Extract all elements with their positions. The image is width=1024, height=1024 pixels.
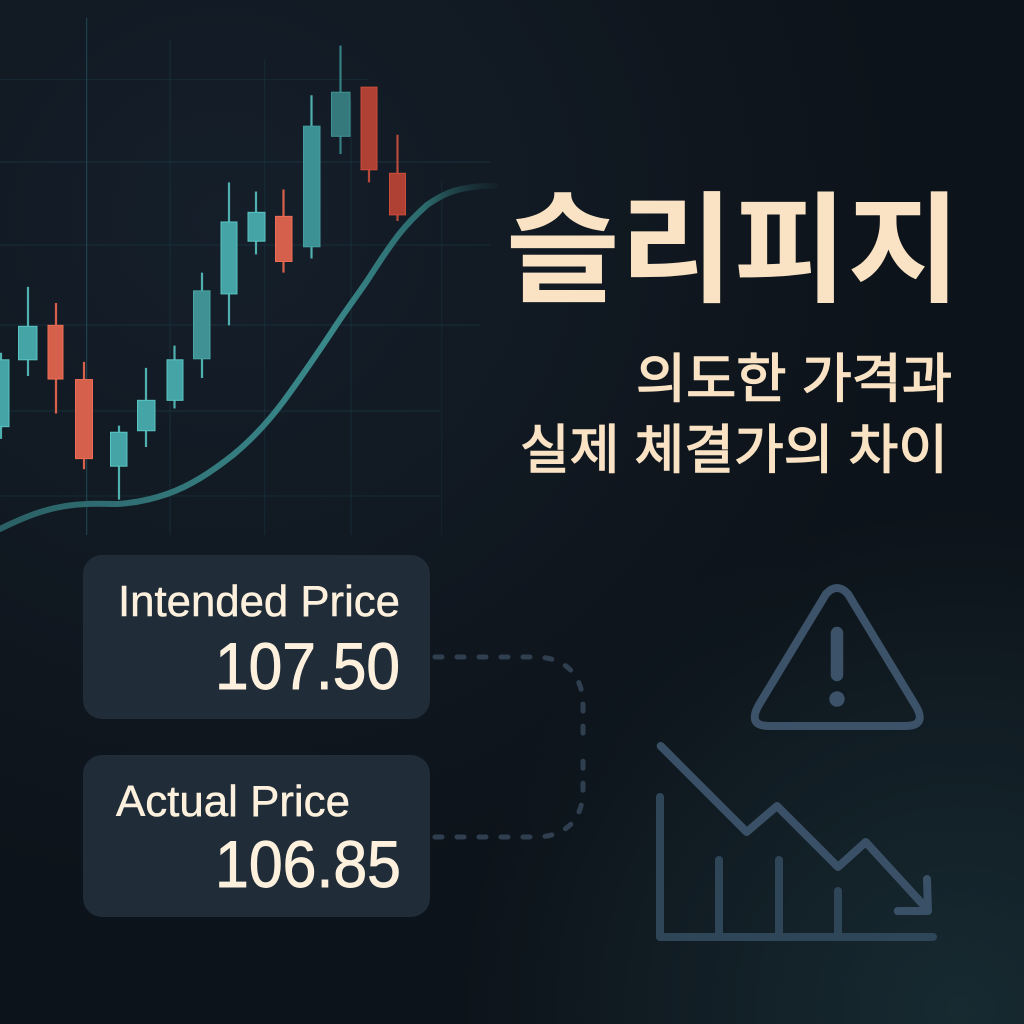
candle 15 [390,135,406,221]
chart axes [660,797,933,937]
candle 4 [76,362,92,469]
subtitle [520,350,952,480]
candle 2 [18,287,37,376]
connector: dashed line between prices [435,657,583,837]
value: intended price: 107.50 [215,629,400,703]
candle 3 [48,303,63,414]
candle 12 [304,95,320,258]
candle 9 [221,182,237,325]
label: actual price: Actual Price [116,777,350,826]
value: actual price: 106.85 [215,827,401,901]
candle 7 [167,346,183,408]
icon: falling chart with arrow [660,746,933,937]
candle 1 [0,353,9,439]
candle 14 [361,87,377,182]
chart: candlesticks [0,46,406,500]
panel: intended price [83,555,430,719]
candle 6 [138,368,155,447]
chart: price grid lines [0,18,490,535]
candle 8 [194,273,210,378]
candle 10 [248,192,265,254]
subtitle line 1: 의도한 가격과 [636,350,952,409]
title: 슬리피지 [506,184,961,318]
subtitle line 2: 실제 체결가의 차이 [520,421,948,480]
icon: warning triangle [755,588,920,726]
falling arrow line [661,746,928,911]
chart bars [719,860,838,936]
label: intended price: Intended Price [118,577,400,626]
candle 11 [276,190,292,273]
candle 5 [110,426,127,500]
panel: actual price [83,755,430,917]
chart: trend curve [0,186,495,529]
candle 13 [332,46,350,154]
